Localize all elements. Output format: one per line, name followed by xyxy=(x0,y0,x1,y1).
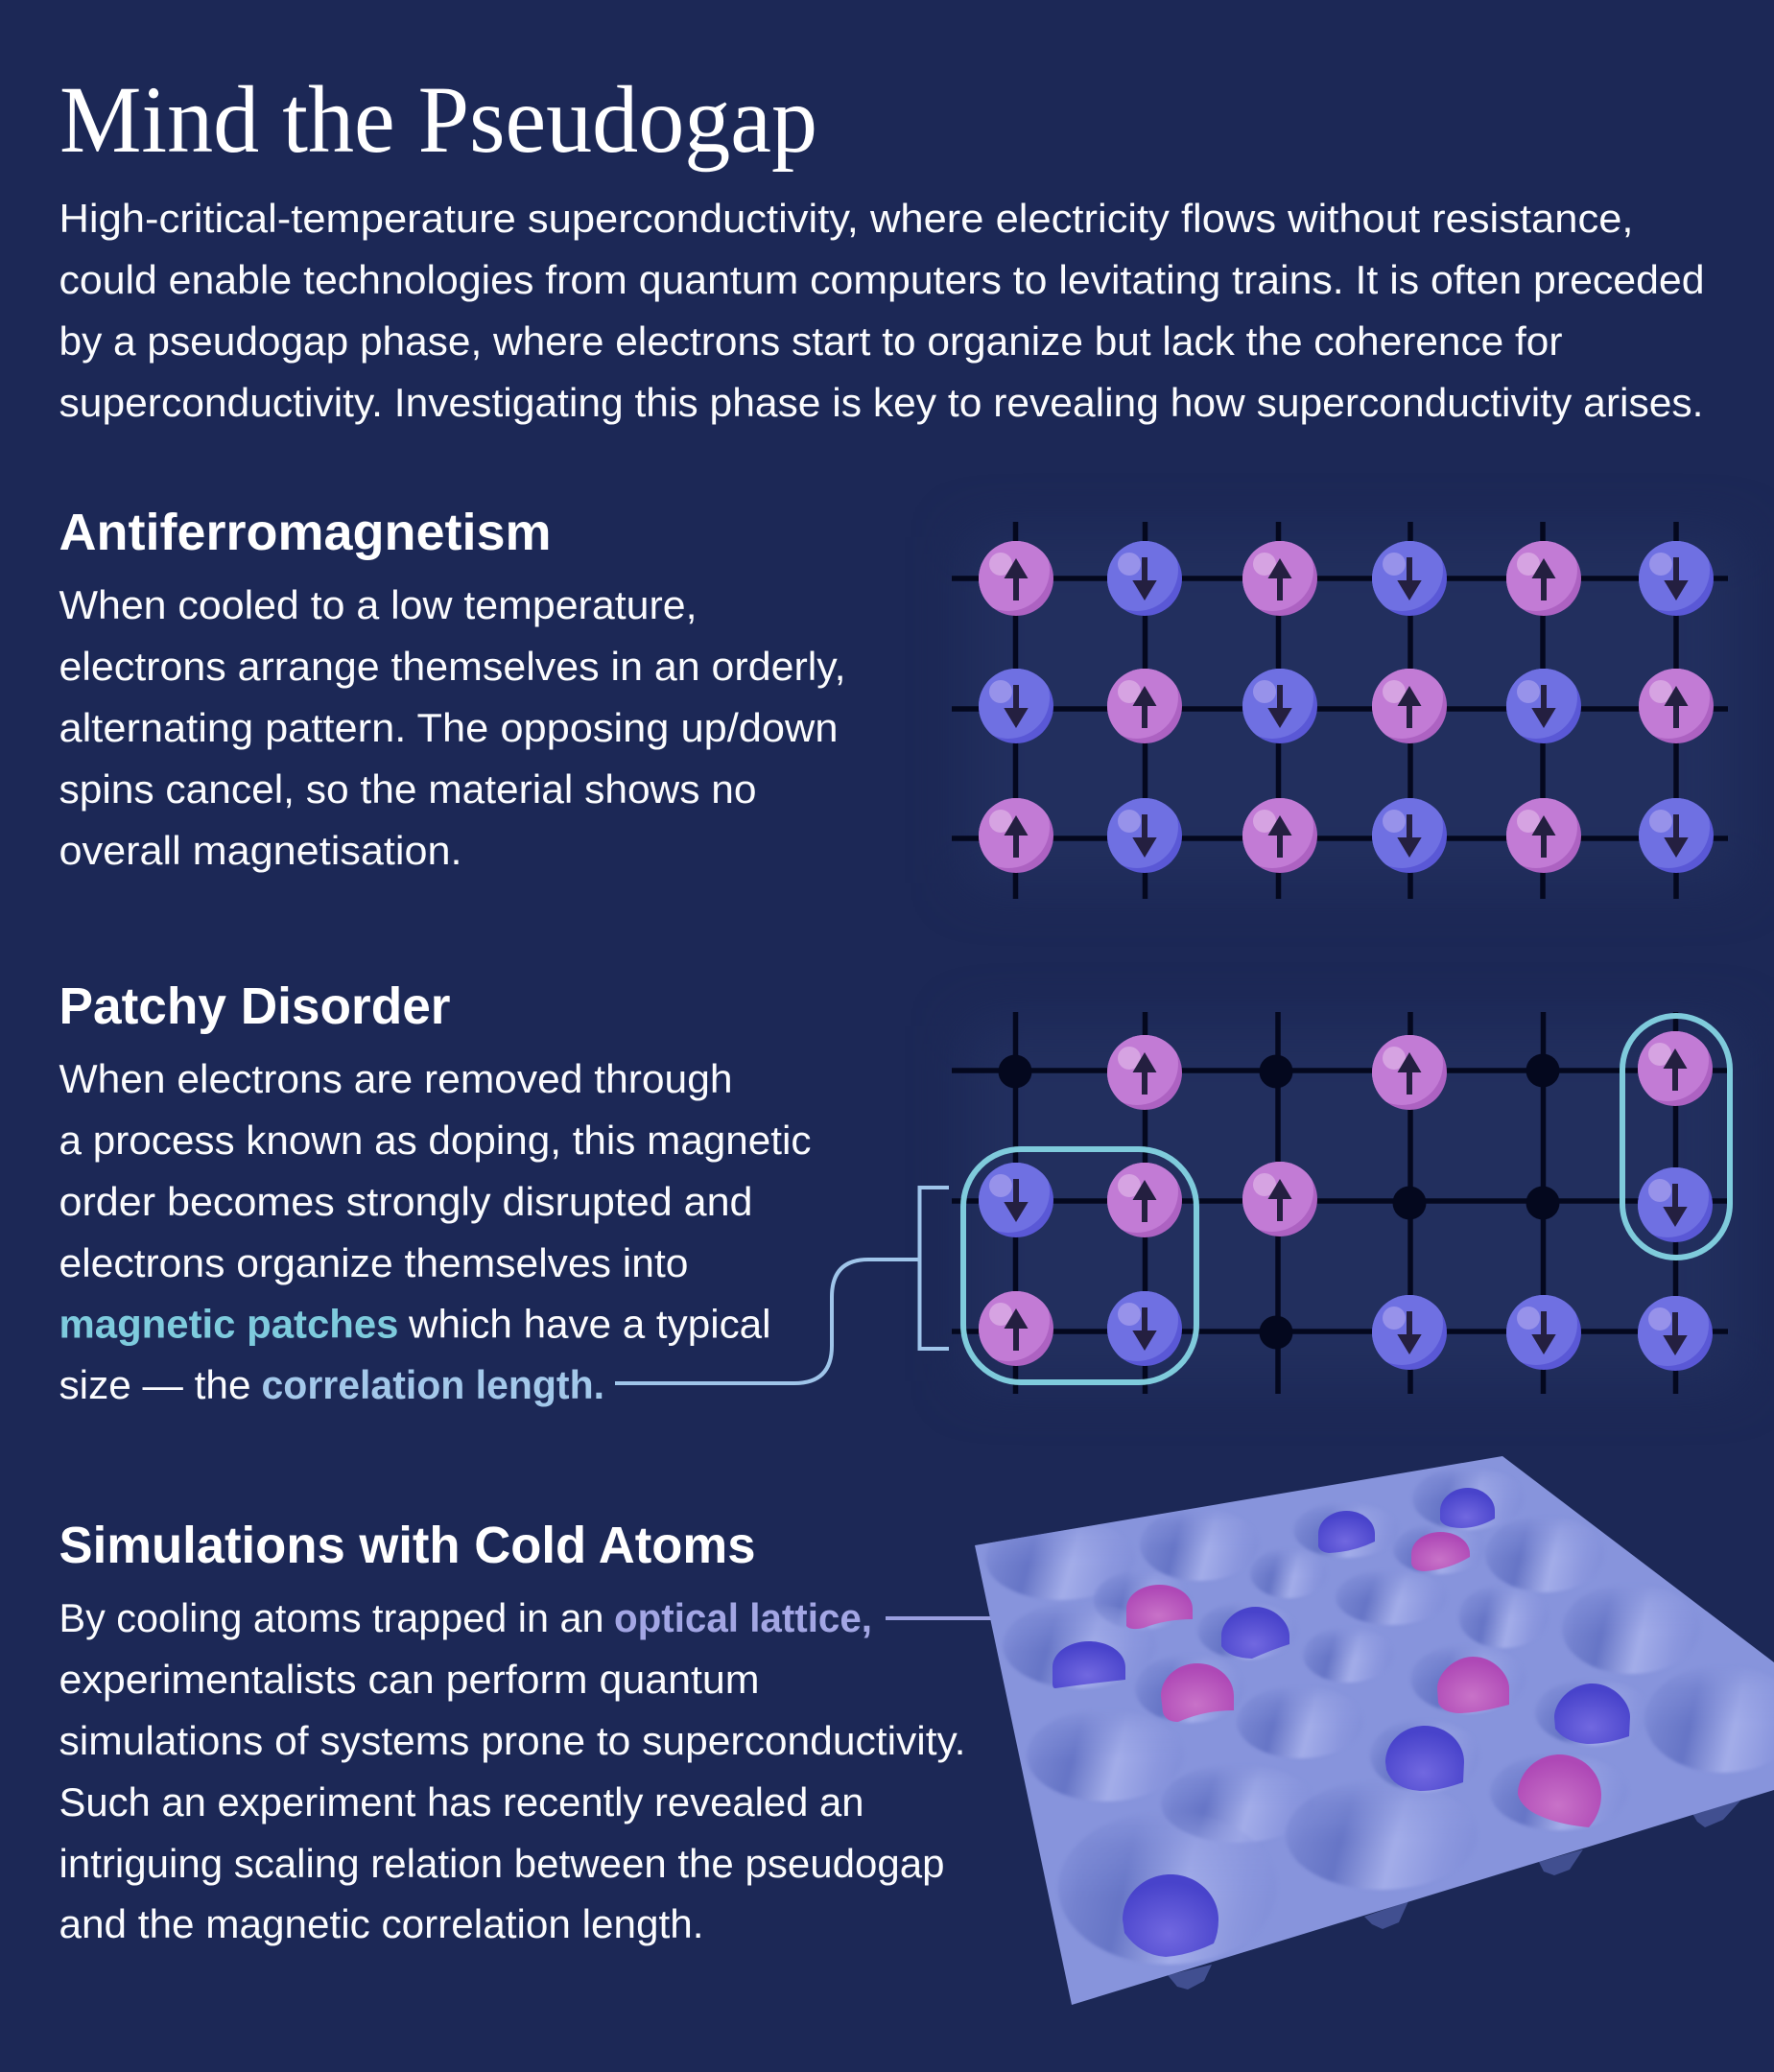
intro text block: by a pseudogap phase, where electrons start to organize but lack the coherence for xyxy=(59,318,1562,364)
text block: Simulations with Cold Atoms xyxy=(59,1595,966,1946)
text block: Antiferromagnetism: When cooled to a low temperature, xyxy=(59,582,697,627)
lattice sheet xyxy=(975,1456,1774,2005)
text block: Simulations with Cold Atoms: By cooling atoms trapped in an xyxy=(59,1595,604,1640)
magnetic patch outline, vertical pair xyxy=(1622,1016,1730,1258)
text block: Patchy Disorder: When electrons are removed through xyxy=(59,1056,733,1101)
potential wells xyxy=(985,1467,1774,1965)
text block: Simulations with Cold Atoms: simulations of systems prone to superconductivity. xyxy=(59,1718,966,1763)
callout: optical lattice leader xyxy=(886,1616,993,1620)
callout: correlation length bracket and leader xyxy=(615,1188,949,1383)
text block: Antiferromagnetism: electrons arrange themselves in an orderly, xyxy=(59,644,846,689)
lattice grid lines xyxy=(952,1012,1728,1394)
spin atoms xyxy=(967,1019,1713,1371)
text block: Antiferromagnetism: spins cancel, so the material shows no xyxy=(59,766,756,812)
spin atoms xyxy=(967,529,1714,873)
text block: Simulations with Cold Atoms: and the magnetic correlation length. xyxy=(59,1901,704,1946)
panel: optical lattice surface xyxy=(975,1456,1774,2005)
pegs under the surface xyxy=(1168,1800,1741,1990)
intro text block: superconductivity. Investigating this phase is key to revealing how superconductivity arises. xyxy=(59,380,1704,425)
magnetic patch outline, 2x2 xyxy=(963,1149,1196,1382)
text block: Simulations with Cold Atoms: Such an experiment has recently revealed an xyxy=(59,1779,863,1825)
title: Mind the Pseudogap xyxy=(59,66,817,173)
text block: Antiferromagnetism xyxy=(59,582,846,873)
heading: Antiferromagnetism: Antiferromagnetism xyxy=(59,504,551,561)
panel: patchy disorder lattice xyxy=(952,1012,1737,1394)
text block: Patchy Disorder: electrons organize themselves into xyxy=(59,1240,689,1285)
text block: Simulations with Cold Atoms: intriguing scaling relation between the pseudogap xyxy=(59,1841,944,1886)
text block: Antiferromagnetism: overall magnetisation. xyxy=(59,828,462,873)
heading: Simulations with Cold Atoms: Simulations with Cold Atoms xyxy=(59,1517,756,1574)
text block: Patchy Disorder xyxy=(59,1056,812,1407)
lattice grid lines xyxy=(952,522,1728,899)
text block: Patchy Disorder: magnetic patches xyxy=(59,1301,399,1347)
intro text block: could enable technologies from quantum computers to levitating trains. It is often preceded xyxy=(59,257,1704,302)
heading: Patchy Disorder: Patchy Disorder xyxy=(59,977,451,1035)
text block: Patchy Disorder: a process known as doping, this magnetic xyxy=(59,1118,812,1163)
trapped atoms xyxy=(1053,1488,1630,1957)
text block: Patchy Disorder: size — the xyxy=(59,1362,251,1407)
text block: Antiferromagnetism: alternating pattern. The opposing up/down xyxy=(59,705,839,750)
intro text block xyxy=(59,196,1704,425)
text block: Patchy Disorder: correlation length. xyxy=(261,1362,604,1407)
vacancy dots xyxy=(998,1053,1560,1349)
text block: Patchy Disorder: which have a typical xyxy=(408,1301,771,1347)
text block: Patchy Disorder: order becomes strongly disrupted and xyxy=(59,1179,753,1224)
intro text block: High-critical-temperature superconductivity, where electricity flows without resistance, xyxy=(59,196,1634,241)
text block: Simulations with Cold Atoms: experimentalists can perform quantum xyxy=(59,1657,759,1702)
text block: Simulations with Cold Atoms: optical lattice, xyxy=(614,1595,872,1640)
panel: antiferromagnetic lattice xyxy=(952,522,1737,899)
